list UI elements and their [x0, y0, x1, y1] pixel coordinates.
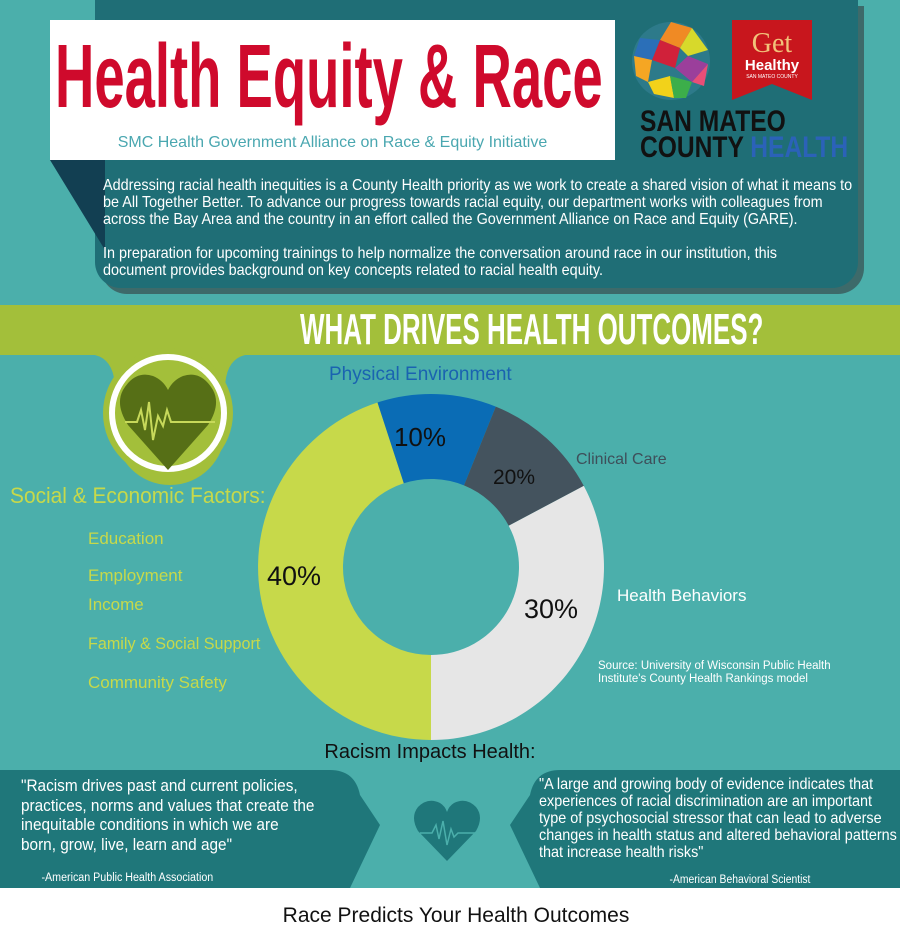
- quote left: -American Public Health Association: [41, 872, 213, 884]
- quote right: [539, 776, 897, 886]
- label: physical environment: Physical Environment: [329, 364, 512, 385]
- social & economic factors list: Social & Economic Factors:: [10, 483, 266, 508]
- subtitle: SMC Health Government Alliance on Race & Equity Initiative: [118, 134, 547, 151]
- source: Source: University of Wisconsin Public Health: [598, 660, 831, 672]
- intro text: be All Together Better. To advance our progress towards racial equity, our department works with colleagues from: [103, 194, 823, 211]
- logo text: [640, 105, 848, 164]
- logo: Get Healthy banner: [732, 20, 812, 100]
- intro text: [103, 177, 852, 279]
- title: Health Equity & Race: [55, 27, 603, 127]
- bottom quote panels: [0, 770, 900, 888]
- quote right: changes in health status and altered behavioral patterns: [539, 827, 897, 844]
- social & economic factors list: [10, 483, 266, 692]
- icon: heart badge: [95, 354, 245, 485]
- quote right: experiences of racial discrimination are an important: [539, 793, 872, 810]
- quote left: born, grow, live, learn and age": [21, 836, 232, 854]
- white footer: [0, 888, 900, 940]
- quote left: inequitable conditions in which we are: [21, 816, 279, 834]
- donut chart: 10%: [394, 422, 446, 452]
- quote left: practices, norms and values that create the: [21, 796, 314, 814]
- social & economic factors list: Community Safety: [88, 673, 227, 692]
- logo text: SAN MATEO: [640, 105, 786, 138]
- racism impacts health heading: Racism Impacts Health:: [324, 741, 536, 763]
- logo: Get Healthy banner: Get: [752, 28, 792, 59]
- social & economic factors list: Family & Social Support: [88, 634, 260, 653]
- intro text: Addressing racial health inequities is a County Health priority as we work to create a shared vision of what it means to: [103, 177, 852, 194]
- intro text: document provides background on key concepts related to racial health equity.: [103, 262, 603, 279]
- logo text: COUNTY HEALTH: [640, 131, 848, 164]
- label: clinical care: Clinical Care: [576, 451, 667, 468]
- footer heading: Race Predicts Your Health Outcomes: [283, 904, 629, 927]
- green band: [0, 305, 900, 355]
- intro text: across the Bay Area and the country in an effort called the Government Alliance on Race and Equity (GARE).: [103, 211, 798, 228]
- quote right: type of psychosocial stressor that can lead to adverse: [539, 810, 882, 827]
- intro text: In preparation for upcoming trainings to help normalize the conversation around race in our institution, this: [103, 245, 777, 262]
- quote left: "Racism drives past and current policies,: [21, 777, 298, 795]
- quote left: [21, 777, 314, 884]
- logo: Get Healthy banner: Healthy: [745, 57, 800, 74]
- social & economic factors list: Employment: [88, 566, 182, 585]
- icon: small heart: [414, 800, 480, 861]
- title box: [50, 20, 615, 160]
- donut chart: 20%: [493, 466, 535, 489]
- donut chart: 40%: [267, 561, 321, 591]
- title fold shadow: [50, 160, 105, 249]
- quote right: -American Behavioral Scientist: [670, 874, 810, 886]
- source: Institute's County Health Rankings model: [598, 673, 808, 685]
- top panel: [95, 0, 858, 288]
- logo: county mosaic: [632, 22, 710, 100]
- source: [598, 660, 831, 685]
- social & economic factors list: Education: [88, 529, 164, 548]
- donut chart: 30%: [524, 594, 578, 624]
- quote right: "A large and growing body of evidence indicates that: [539, 776, 873, 793]
- logo: Get Healthy banner: SAN MATEO COUNTY: [746, 74, 798, 80]
- label: health behaviors: Health Behaviors: [617, 586, 746, 605]
- social & economic factors list: Income: [88, 595, 144, 614]
- heading: WHAT DRIVES HEALTH OUTCOMES?: [300, 305, 763, 354]
- quote right: that increase health risks": [539, 844, 703, 861]
